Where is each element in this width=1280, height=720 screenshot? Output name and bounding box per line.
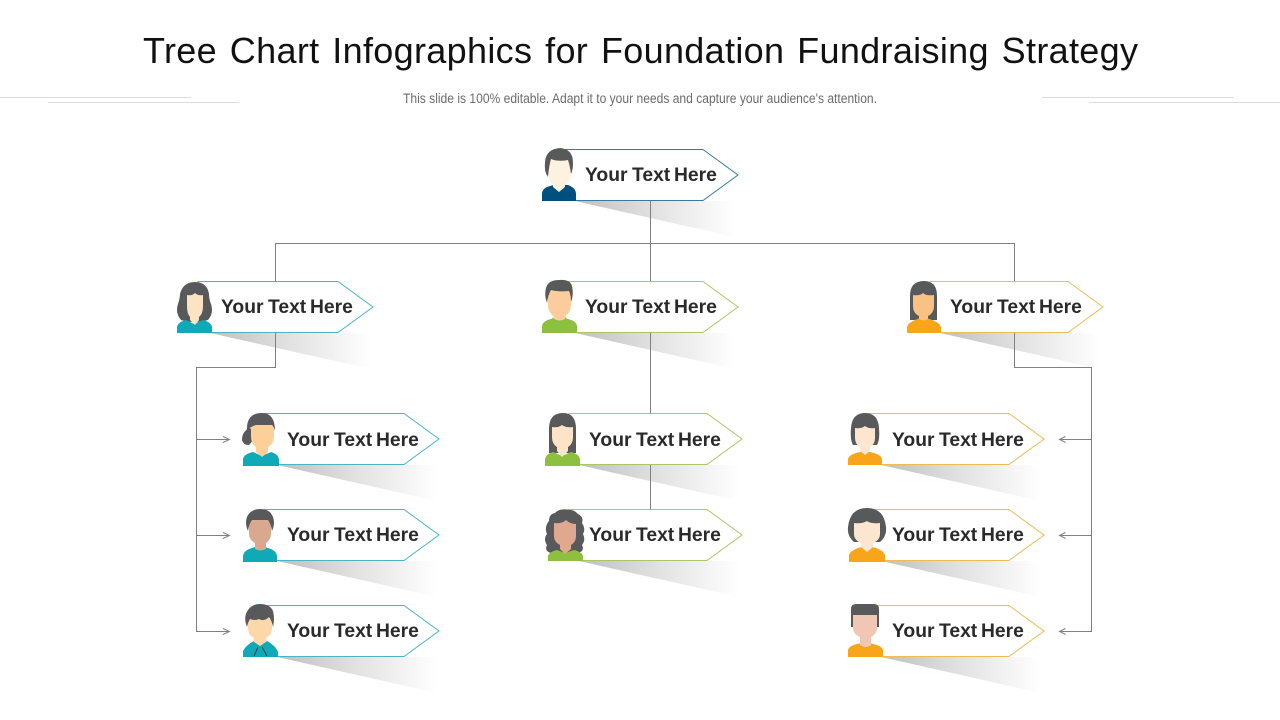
node: right child one [848,413,1044,465]
avatar: teal man with collar [243,604,278,657]
avatar: teal woman with ponytail [242,413,279,466]
label: Here [981,621,1024,642]
label: Here [376,525,419,546]
label: Text [636,430,675,451]
label: Text [636,525,675,546]
connector: centre branch [650,333,652,509]
title: Tree Chart Infographics for Foundation Fundraising Strategy [143,30,1138,71]
avatar: green woman curly hair [545,509,584,561]
label: Here [674,297,717,318]
connector: left branch with arrows [196,333,276,634]
node: centre child one [545,413,742,466]
avatar: teal woman [177,282,212,333]
label: Your [589,430,632,451]
node: centre child two [545,509,742,561]
label: Your [221,297,264,318]
node: right child two [848,508,1044,562]
avatar: orange woman bob [848,413,882,465]
connector: root to level two [276,201,1014,281]
node: level two centre [542,280,738,333]
label: Here [1039,297,1082,318]
label: Text [997,297,1036,318]
subtitle: This slide is 100% editable. Adapt it to your needs and capture your audience's attention. [403,91,877,106]
label: Your [585,165,628,186]
label: Your [892,621,935,642]
label: Here [310,297,353,318]
label: Here [376,430,419,451]
node: level two right [907,281,1103,333]
drop shadows [210,201,1100,693]
label: Here [678,525,721,546]
avatar: green man [542,280,577,333]
avatar: orange man square hair [848,604,883,657]
label: Here [376,621,419,642]
label: Your [287,525,330,546]
label: Your [287,430,330,451]
label: Here [981,430,1024,451]
avatar: green woman long hair [545,413,580,466]
label: Your [585,297,628,318]
node: right child three [848,604,1044,657]
label: Text [939,430,978,451]
avatar: teal man [243,509,277,562]
label: Text [334,621,373,642]
label: Your [589,525,632,546]
label: Text [334,525,373,546]
label: Your [892,430,935,451]
label: Text [939,525,978,546]
avatar: orange woman [907,281,941,333]
label: Text [334,430,373,451]
label: Here [674,165,717,186]
label: Your [287,621,330,642]
node: root [542,148,738,201]
node: left child one [242,413,439,466]
label: Text [632,297,671,318]
label: Text [632,165,671,186]
avatar: navy man [542,148,576,201]
connector: right branch with arrows [1014,333,1092,634]
label: Text [268,297,307,318]
avatar: orange woman round hair [848,508,886,562]
label: Here [981,525,1024,546]
label: Your [950,297,993,318]
label: Text [939,621,978,642]
label: Your [892,525,935,546]
label: Here [678,430,721,451]
node: left child three [243,604,439,657]
node: level two left [177,282,373,333]
node: left child two [243,509,439,562]
